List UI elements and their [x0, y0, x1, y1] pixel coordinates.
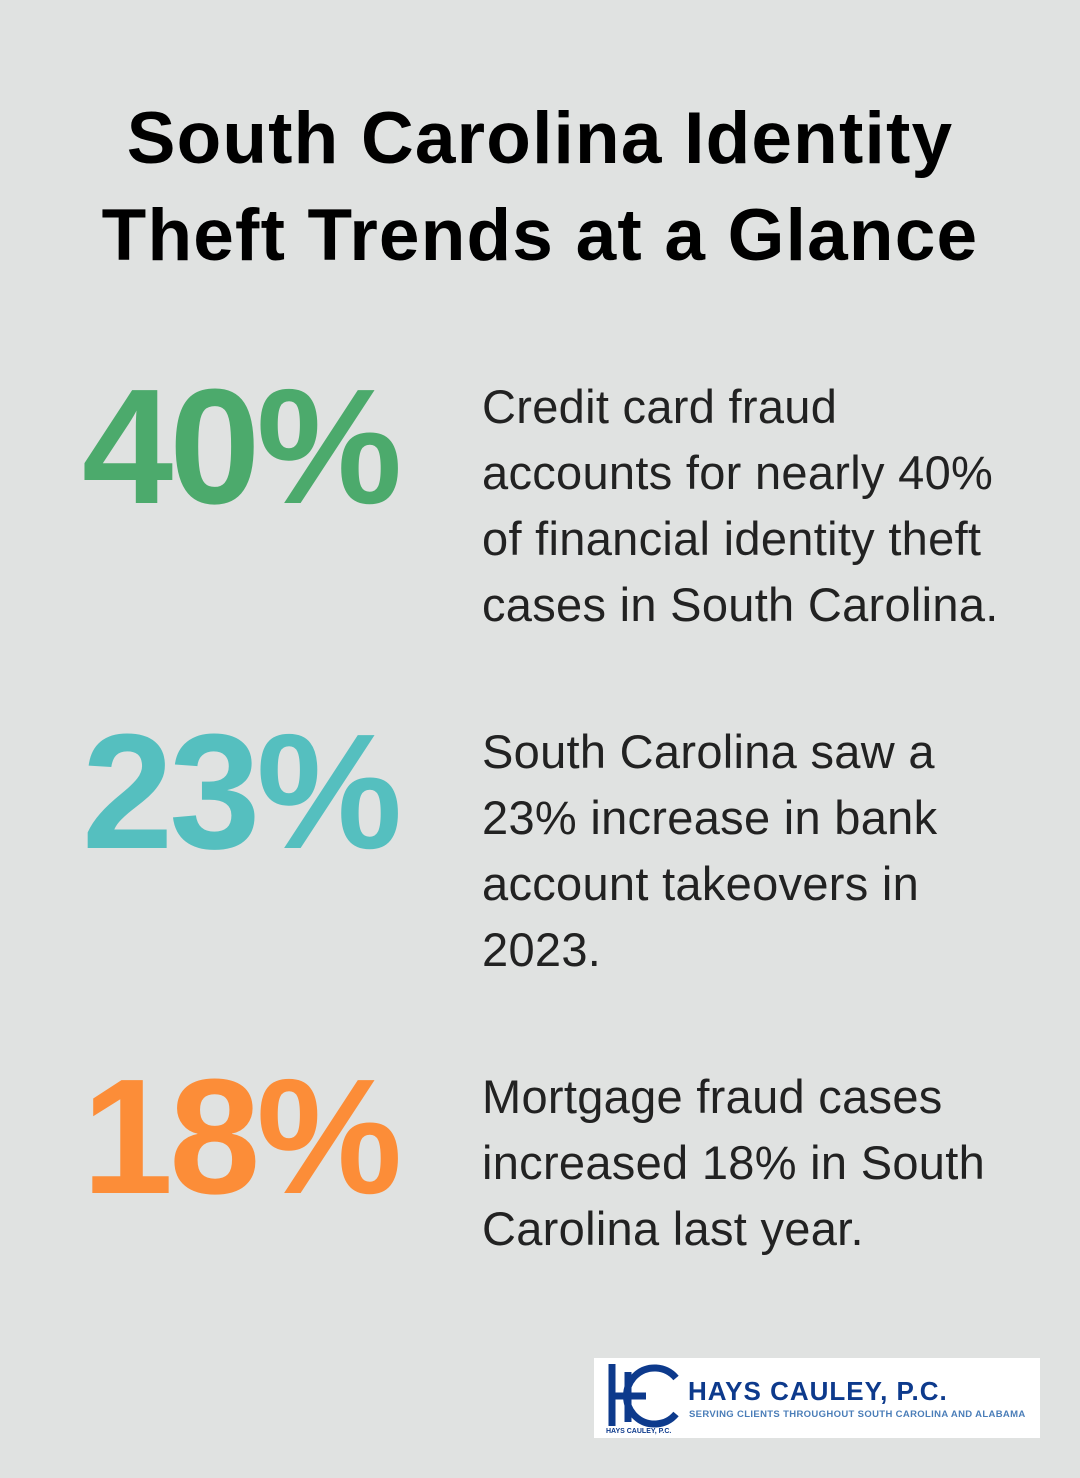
icon: HC monogram — [608, 1364, 679, 1428]
stat 2 text: South Carolina saw a — [482, 725, 935, 778]
stat 1 text: of financial identity theft — [482, 512, 981, 565]
stat 3 text: Mortgage fraud cases — [482, 1070, 943, 1123]
stat 3 text — [482, 1070, 985, 1255]
stat 2 text: 2023. — [482, 923, 601, 976]
stat 2 text — [482, 725, 938, 976]
logo small caption: HAYS CAULEY, P.C. — [606, 1428, 671, 1435]
stat 1 number: 40% — [82, 355, 398, 538]
stat 1 text: cases in South Carolina. — [482, 578, 999, 631]
stat 2 text: 23% increase in bank — [482, 791, 937, 844]
stat 3 text: Carolina last year. — [482, 1202, 864, 1255]
stat 1 text — [482, 380, 999, 631]
stat 1 text: accounts for nearly 40% — [482, 446, 993, 499]
logo name: HAYS CAULEY, P.C. — [688, 1376, 948, 1406]
stat 3 text: increased 18% in South — [482, 1136, 985, 1189]
title: Theft Trends at a Glance — [102, 195, 978, 276]
stat 3 number: 18% — [82, 1045, 398, 1228]
stat 2 number: 23% — [82, 700, 398, 883]
stat 2 text: account takeovers in — [482, 857, 919, 910]
stat 1 text: Credit card fraud — [482, 380, 837, 433]
title — [102, 98, 978, 276]
logo tagline: SERVING CLIENTS THROUGHOUT SOUTH CAROLINA AND ALABAMA — [689, 1409, 1026, 1420]
logo — [594, 1358, 1040, 1438]
title: South Carolina Identity — [127, 98, 953, 179]
